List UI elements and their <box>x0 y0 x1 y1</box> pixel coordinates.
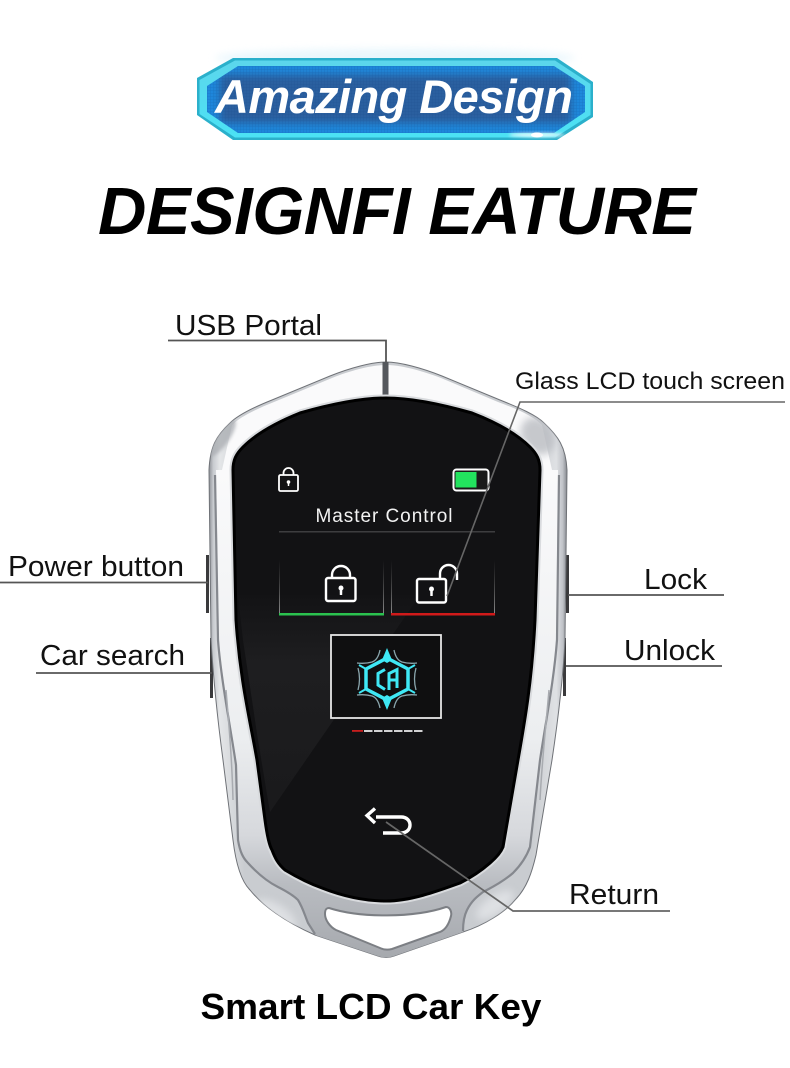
callout: Unlock: Unlock <box>624 635 715 667</box>
callout: Car search: Car search <box>40 640 185 672</box>
page indicator <box>352 730 423 732</box>
shoulder shading <box>210 419 238 457</box>
callout: Return <box>386 822 670 911</box>
return icon <box>367 808 410 833</box>
lock button <box>279 560 384 616</box>
heading: DESIGNFI EATURE <box>98 174 698 249</box>
icon: CF snowflake logo <box>357 648 417 710</box>
side buttons <box>206 555 569 698</box>
banner text: Amazing Design <box>214 70 573 123</box>
shell shading <box>204 362 563 960</box>
unlock button <box>391 560 495 616</box>
title divider <box>279 531 495 532</box>
callout: Lock: Lock <box>644 564 708 596</box>
inner band <box>216 470 558 960</box>
callout: USB Portal <box>168 310 386 362</box>
glass touch screen <box>233 398 540 901</box>
glass reflection <box>238 595 420 812</box>
car key device <box>204 362 569 960</box>
logo panel <box>331 635 441 718</box>
callout: Glass LCD touch screen <box>447 368 785 596</box>
callout: Return: Return <box>569 879 659 911</box>
callout: Power button: Power button <box>8 551 184 583</box>
screen title: Master Control <box>316 506 452 527</box>
contour lines <box>215 475 559 934</box>
battery icon <box>454 470 488 490</box>
key body metal shell <box>209 362 567 958</box>
USB seam <box>382 362 388 395</box>
lock status icon <box>279 468 298 491</box>
callout: Glass LCD touch screen: Glass LCD touch screen <box>515 368 785 395</box>
callout: USB Portal: USB Portal <box>175 310 322 342</box>
key ring loop <box>325 907 451 950</box>
caption: Smart LCD Car Key <box>200 986 542 1027</box>
screen bright rim <box>233 398 540 901</box>
top bezel <box>222 365 552 470</box>
banner: Amazing Design <box>197 49 600 140</box>
